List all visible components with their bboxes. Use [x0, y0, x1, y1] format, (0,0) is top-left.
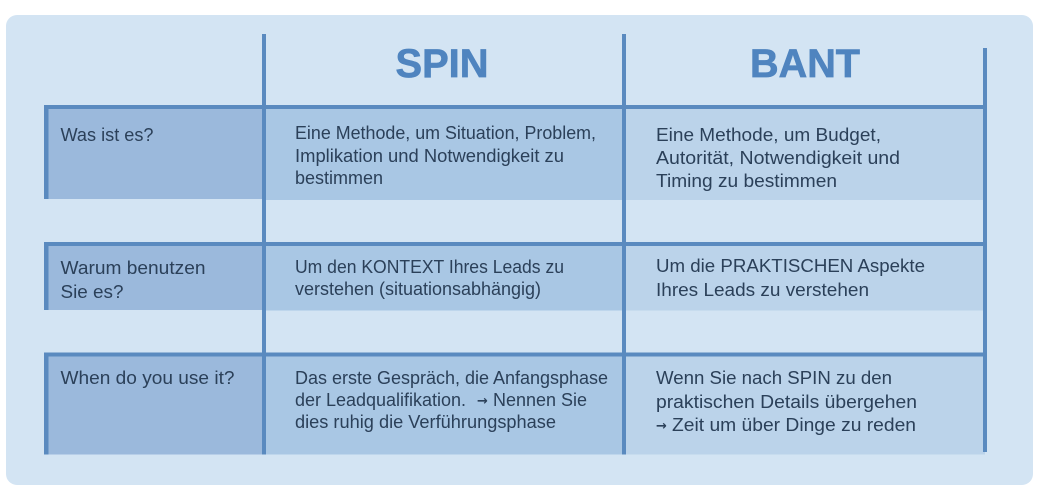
BANT: Was ist es? — [656, 125, 900, 191]
BANT: Was ist es?: Autorität, Notwendigkeit und — [656, 148, 900, 168]
heading: SPIN: SPIN — [396, 42, 488, 86]
row: Was ist es? — [44, 105, 985, 200]
icon: arrow: → — [477, 394, 488, 409]
label: Warum benutzen Sie es?: Sie es? — [60, 282, 124, 302]
column divider: right edge — [983, 48, 987, 452]
label: When do you use it?: When do you use it? — [60, 368, 234, 388]
icon: arrow: → — [656, 419, 667, 434]
SPIN: Warum benutzen Sie es?: verstehen (situationsabhängig) — [295, 279, 541, 299]
column divider: label / SPIN — [262, 34, 266, 454]
SPIN: Was ist es? — [295, 123, 596, 188]
BANT: Was ist es?: Eine Methode, um Budget, — [656, 125, 881, 145]
SPIN: When do you use it?: der Leadqualifikation. — [295, 390, 466, 410]
row: Warum benutzen Sie es? — [44, 242, 985, 310]
SPIN: Warum benutzen Sie es?: Um den KONTEXT Ihres Leads zu — [295, 257, 564, 277]
label: Warum benutzen Sie es? — [60, 258, 206, 302]
row: When do you use it? — [44, 352, 985, 454]
SPIN: When do you use it? — [295, 368, 608, 432]
BANT: Warum benutzen Sie es? — [656, 256, 925, 300]
BANT: When do you use it?: Zeit um über Dinge zu reden — [672, 415, 916, 435]
heading: BANT: BANT — [750, 42, 860, 86]
SPIN: Warum benutzen Sie es? — [295, 257, 564, 299]
BANT: Was ist es?: Timing zu bestimmen — [656, 171, 837, 191]
BANT: When do you use it? — [656, 368, 917, 435]
SPIN: When do you use it?: Nennen Sie — [493, 390, 587, 410]
label: Warum benutzen Sie es?: Warum benutzen — [60, 258, 206, 278]
SPIN: Was ist es?: Implikation und Notwendigkeit zu — [295, 146, 564, 166]
BANT: When do you use it?: Wenn Sie nach SPIN zu den — [656, 368, 892, 388]
SPIN: Was ist es?: bestimmen — [295, 168, 383, 188]
column divider: SPIN / BANT — [622, 34, 626, 454]
BANT: When do you use it?: praktischen Details übergehen — [656, 392, 917, 412]
BANT: Warum benutzen Sie es?: Ihres Leads zu verstehen — [656, 280, 869, 300]
SPIN: When do you use it?: dies ruhig die Verführungsphase — [295, 412, 556, 432]
BANT: Warum benutzen Sie es?: Um die PRAKTISCHEN Aspekte — [656, 256, 925, 276]
table: comparison — [44, 34, 987, 454]
SPIN: Was ist es?: Eine Methode, um Situation, Problem, — [295, 123, 596, 143]
SPIN: When do you use it?: Das erste Gespräch, die Anfangsphase — [295, 368, 608, 388]
label: Was ist es?: Was ist es? — [60, 125, 154, 145]
